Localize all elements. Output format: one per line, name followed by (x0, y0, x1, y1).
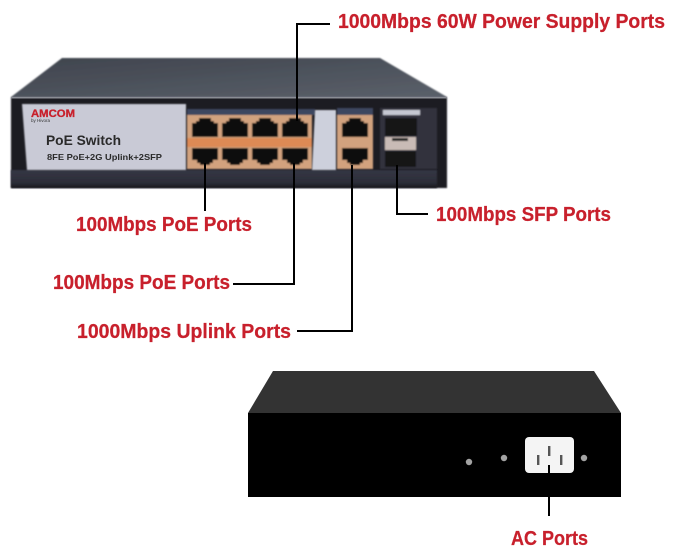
label: PoE ports 2: 100Mbps PoE Ports (53, 271, 230, 294)
label strip between port blocks (312, 110, 336, 170)
label: power supply ports: 1000Mbps 60W Power Supply Ports (338, 10, 665, 33)
screws (466, 455, 587, 465)
PoE port block (187, 109, 315, 169)
line: uplink ports (297, 165, 352, 331)
product spec: 8FE PoE+2G Uplink+2SFP (47, 152, 162, 162)
line: SFP ports (397, 165, 428, 214)
product name: PoE Switch (46, 132, 121, 148)
label: AC ports: AC Ports (511, 527, 588, 550)
uplink port block (337, 108, 373, 169)
AC socket (525, 437, 574, 473)
switch front face (11, 97, 447, 188)
switch rear view (248, 371, 621, 497)
product label: by Hivora (31, 118, 51, 123)
label: SFP ports: 100Mbps SFP Ports (436, 203, 611, 226)
line: power supply ports (297, 24, 330, 121)
leader lines (205, 24, 549, 516)
line: AC ports (548, 465, 550, 516)
label: PoE ports 1: 100Mbps PoE Ports (76, 213, 252, 236)
brand logo: AMCOM (31, 108, 75, 120)
switch top face (11, 58, 447, 97)
SFP port block (380, 108, 437, 169)
rear panel (248, 413, 621, 497)
switch front view (11, 58, 447, 188)
rear top face (248, 371, 621, 413)
line: PoE ports 2 (233, 163, 294, 284)
product label (22, 104, 186, 170)
line: PoE ports 1 (204, 163, 206, 211)
label: uplink ports: 1000Mbps Uplink Ports (77, 320, 291, 343)
